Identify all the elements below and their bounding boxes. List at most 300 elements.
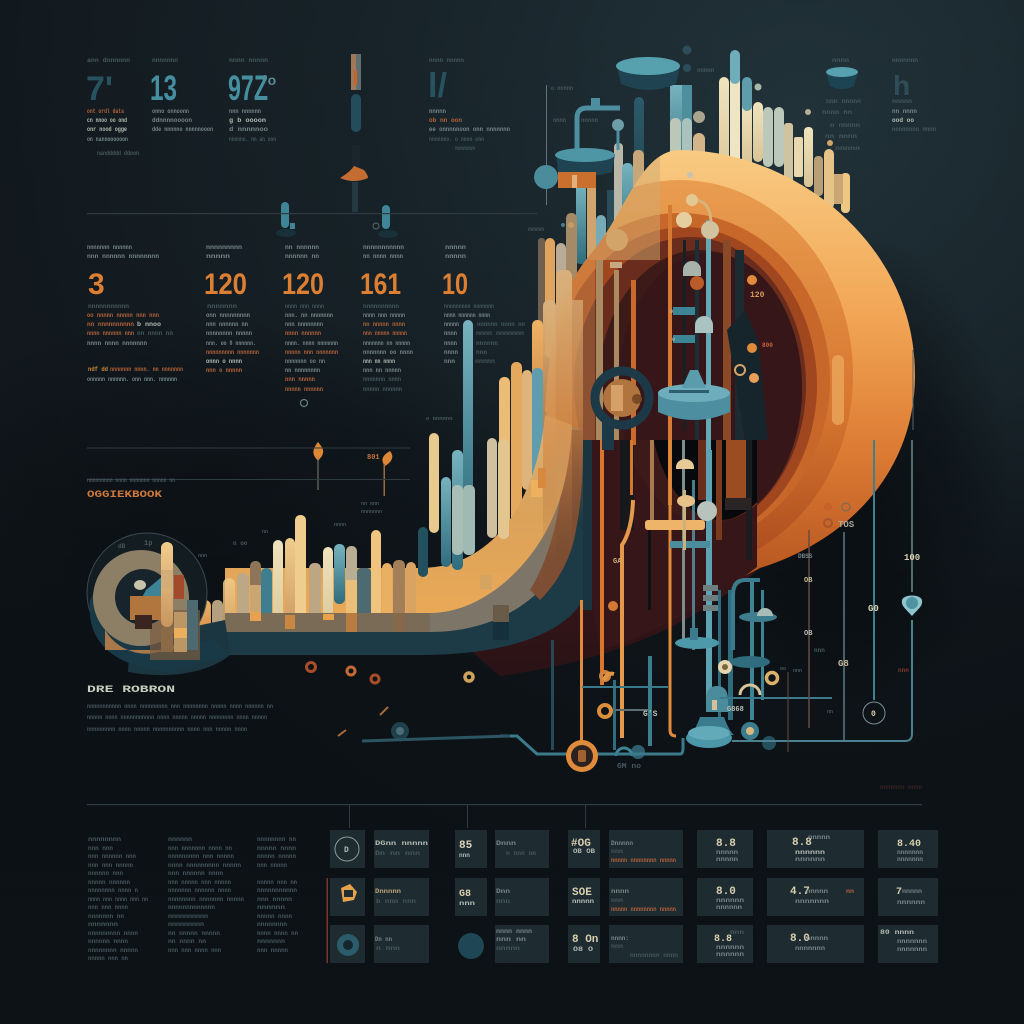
orange stat 120 second: 120 <box>282 268 324 301</box>
orange stat 3: nn nnnnnnnnnn <box>87 321 134 328</box>
footer text column 2: nnnnnnnnn nnn nnnnn <box>168 853 234 860</box>
orange stat 161: nnnnnnnnnn <box>363 303 399 310</box>
footer card row 1: 8.8 <box>716 838 736 850</box>
right-side labels: OB <box>804 630 813 638</box>
footer card row 3: nnnnnn <box>716 944 745 951</box>
footer text column 3: nnnnn nnnn <box>257 913 292 920</box>
footer card row 2: b nnn nnn <box>376 898 416 905</box>
footer card row 2: nnnnn <box>902 888 922 895</box>
footer text column 2: nnnnnn <box>168 836 192 843</box>
right-side labels: G868 <box>727 706 744 714</box>
orange stat 120 second: nnnnnn nn <box>285 253 319 260</box>
right-side labels: nn <box>827 709 833 715</box>
top stat 1: ont ordl data <box>87 108 124 115</box>
teal ball on stem <box>534 85 558 205</box>
floating beads <box>561 84 833 228</box>
top stat 3: nnn nnnnnn <box>229 108 261 115</box>
top stat 4: nnnnn <box>429 108 446 115</box>
chart labels: 120 <box>750 291 765 300</box>
ring gauge lower right <box>863 702 885 724</box>
footer text column 1: nnn nnn nnnnn <box>88 862 133 869</box>
orange stat 10: nnnn <box>444 330 457 337</box>
footer card row 1 <box>330 830 938 868</box>
central capsule column <box>340 54 368 212</box>
footer text column 2: nnn nnnnnn nnnn <box>168 870 223 877</box>
footer card row 3: nnnnnnnn nnnn <box>630 952 678 959</box>
footer card row 1: 8.40 <box>897 839 921 850</box>
footer card row 1: Dnnn <box>496 840 517 847</box>
footer card row 3: Dn nn <box>375 936 392 943</box>
footer card row 1: Dnnnnn <box>611 840 633 847</box>
orange stat 120 second: nn nnnnnn <box>285 244 319 251</box>
teal capsules on divider <box>276 202 398 238</box>
orange stat 3: onnnnn nnnnnn. onn nnn. nnnnnn <box>87 376 177 383</box>
top stat 1: cn nnoo oo ond <box>87 117 127 124</box>
footer card row 2: 7 <box>896 887 902 898</box>
right-side labels: oo <box>780 666 786 672</box>
footer card row 3: nnnnnnn <box>897 946 927 953</box>
section title: orange: nnnnnnnnn nnnn nnnnnnn nnnnn nn <box>87 477 175 484</box>
chart labels: nn <box>262 529 268 535</box>
orange stat 120 second: nnnnnnn oo nn <box>285 358 325 365</box>
second teal cap <box>555 148 615 188</box>
orange stat 120 second: nnn nnnnnnnn <box>285 321 323 328</box>
footer card row 1: OB OB <box>573 848 595 855</box>
footer card row 2: nn <box>846 888 854 895</box>
orange stat 10: nnn <box>476 349 487 356</box>
orange stat 3: on nnnn nn <box>137 330 173 337</box>
orange stat 3: nnnn nnnnnn nnn <box>87 330 134 337</box>
footer card row 3: nnnnnnn <box>897 938 927 945</box>
orange stat 120 first: nnnnnnnn nnnnn <box>206 330 252 337</box>
right-side labels: DBSS <box>798 553 813 560</box>
orange stat 120 first: nnnnnnnnn <box>206 244 242 251</box>
left faded columns over the ring <box>543 260 603 560</box>
section title: orange <box>87 477 175 501</box>
orange stat 161: 161 <box>360 268 401 301</box>
chart labels: 0 <box>670 309 673 315</box>
ring with keyhole <box>595 371 649 450</box>
orange stat 161: nnn nn nnnnn <box>363 367 401 374</box>
chart labels: nnnnn <box>697 67 714 74</box>
footer text column 2: nnnnnnnn nnnnnnn nnnnn <box>168 896 244 903</box>
bulb gauge <box>902 596 922 616</box>
footer card row 3: nnnnn <box>496 945 521 952</box>
right-side labels: nnn <box>793 668 802 674</box>
orange stat 10: nnnn <box>444 349 458 356</box>
footer text column 2: nnn nnnnnnn nnnn nn <box>168 845 232 852</box>
footer card row 2: nnnnnn <box>716 897 745 904</box>
footer card row 3: 8.8 <box>714 934 732 945</box>
footer card row 2: nnnnnn <box>716 904 742 911</box>
orange stat 10: nnnnn <box>445 253 466 260</box>
orange stat 161: nnn nnnnn nnnnn <box>363 330 407 337</box>
section title: orange: OGGIEKBOOK <box>87 490 162 501</box>
chart labels: 0 <box>672 337 675 343</box>
right-side labels: h <box>893 70 910 101</box>
orange stat 161: nn nnnnn nnnn <box>363 321 405 328</box>
right-side labels: nnnn nn <box>822 109 852 116</box>
footer text column 2: nnnnnnnnnn <box>168 913 208 920</box>
footer card row 3: nnnn nnnn <box>496 928 532 935</box>
footer text column 1: nnnnn nnnnnn <box>88 879 130 886</box>
footer text column 2 <box>168 836 244 954</box>
top stat 4: ob nn oon <box>429 117 462 124</box>
footer accent line <box>326 878 328 963</box>
footer card row 1: nnnnnn <box>795 856 826 863</box>
footer text column 1: nnnnnn nnnn <box>88 938 128 945</box>
orange stat 161: nnnnnnn nn nnnnn <box>363 340 410 347</box>
bottom pipe network <box>500 350 913 754</box>
top teal gear cap <box>616 46 692 90</box>
chart labels: nnnnnnn <box>361 509 382 515</box>
footer card row 1: nnnnnnn <box>897 856 923 863</box>
footer card row 2: nnnnn <box>572 898 594 905</box>
spiral dial, left end of the band <box>87 533 230 675</box>
orange stat 3: nnnnnnn nnnn. nn nnnnnnn <box>110 366 183 373</box>
top stat 4: nnnn nnnnn <box>429 57 464 64</box>
top stat 4 <box>428 57 510 152</box>
footer text column 2: nnnnnnn nnnnnn nnnn <box>168 887 231 894</box>
top stat 1: nanddddd ddoon <box>97 150 139 157</box>
footer text column 3: nnnnnnn <box>257 938 285 945</box>
orange stat 120 first: nnnnnnnnn nnnnnnn <box>206 349 259 356</box>
orange stat 161: nnnnnnn nnnn <box>363 376 401 383</box>
footer card row 1: n nnn nn <box>506 850 536 857</box>
chart labels: nnnnn <box>581 117 598 124</box>
teal arch pipe <box>577 98 624 150</box>
S-shaped band: brown edge <box>530 430 583 600</box>
top stat 2: nnnnnnn <box>152 57 178 64</box>
orange stat 120 first: nnn nnnnnn nn <box>206 321 248 328</box>
footer text column 1: nnnnnnn <box>88 921 118 928</box>
orange stat 120 second: nnnn. nnnn nnnnnnn <box>285 340 338 347</box>
S-shaped band: navy layer <box>225 430 583 655</box>
chart labels: nnn <box>198 553 207 559</box>
spiral dial, left end of the band: 1p <box>144 540 152 548</box>
footer text column 3 <box>257 836 298 954</box>
footer text column 1: nnn nnnnnn nnn <box>88 853 136 860</box>
footer card row 2: nnnnnn <box>897 899 926 906</box>
orange stat 120 second <box>282 244 338 393</box>
top stat 1: on nannoooooon <box>87 136 128 143</box>
footer text column 1: nnnnnn nnn <box>88 870 123 877</box>
spiral dial, left end of the band: dB <box>118 543 126 550</box>
footer card row 3: 8 On <box>572 934 598 946</box>
footer card row 1: nnn <box>459 852 470 859</box>
footer card row 3: O8 O <box>573 946 594 953</box>
main ring: concentric arcs <box>545 150 915 576</box>
orange stat 3: b nnoo <box>137 321 161 328</box>
orange stat 120 first: nnn o nnnnn <box>206 367 242 374</box>
footer text column 1 <box>88 836 148 962</box>
orange stat 120 first: onnn o nnnn <box>206 358 242 365</box>
orange stat 10: nnnn nnnnnn nnnn <box>444 312 490 319</box>
footer text column 3: nnn nnnnn <box>257 862 287 869</box>
orange stat 3 <box>87 244 183 383</box>
orange stat 161: nnnnnnnnnnn <box>363 244 404 251</box>
orange and teal pipes lower section <box>551 440 764 750</box>
orange stat 3: ndf dd <box>88 366 108 373</box>
orange stat 3: nnn nnnnnn nnnnnnnn <box>87 253 159 260</box>
orange stat 161: nnnnnnn oo nnnn <box>363 349 413 356</box>
footer card row 2: G8 <box>459 889 471 900</box>
top stat 3: nnnnnn. nn an oon <box>229 136 276 143</box>
footer card row 3: nnn <box>611 943 623 950</box>
orange stat 120 second: nnnnn nnnnnn <box>285 386 323 393</box>
chart labels: nnnn <box>553 117 566 124</box>
right-side labels: G'S <box>643 710 658 719</box>
footer text column 3: nnnn nnnn nn <box>257 930 298 937</box>
ring gauge lower right: 0 <box>871 710 876 719</box>
footer card row 1: nnnnnnn <box>897 849 923 856</box>
top stat 4: nnnnn <box>455 145 475 152</box>
chart labels: nnnn <box>334 522 346 528</box>
right-side labels: G0 <box>868 604 879 614</box>
right-side labels: nnnnnnn <box>892 57 918 64</box>
orange stat 120 second: nn nnnnnnnn <box>285 367 320 374</box>
right-side labels: nnn <box>898 667 909 674</box>
right-side labels: nnn nnnnn <box>826 98 861 105</box>
orange stat 10: nnnn nnnnnnn <box>476 330 524 337</box>
footer card row 1: nnnnnn <box>795 849 826 856</box>
pump machinery <box>616 459 778 759</box>
orange stat 161: nn nnnn nnnn <box>363 253 403 260</box>
orange stat 161: nnnn nnn nnnnn <box>363 312 405 319</box>
footer card row 3 <box>330 925 938 963</box>
orange stat 120 first: onn nnnnnnnnn <box>206 312 250 319</box>
orange stat 120 first: nnnnn <box>206 253 231 260</box>
footer card row 1: DGnn nnnnn <box>375 840 429 847</box>
orange stat 161: nnn nn nnnn <box>363 358 395 365</box>
orange stat 10: nnn <box>444 358 455 365</box>
small valves and dots <box>300 400 850 741</box>
orange stat 10: nnnnn <box>445 244 466 251</box>
footer card row 3: nnnn: <box>611 935 629 942</box>
footer card row 3: nnnnn <box>806 935 828 942</box>
footer text column 2: nnnnnnnnn <box>168 921 204 928</box>
footer card row 2: nnnnn nnnnnnnn nnnnn <box>611 906 676 913</box>
footer text column 2: nnn nnnnn nnn nnnnn <box>168 879 231 886</box>
top stat 3: °o <box>262 72 276 88</box>
right-side labels: nnn <box>814 647 825 654</box>
right-side labels: GM no <box>617 763 641 771</box>
footer text column 3: nnnnnnnnnnn <box>257 887 297 894</box>
top stat 3 <box>228 57 276 143</box>
orange stat 3: oo nnnnn nnnnn nnn nnn <box>87 312 159 319</box>
footer card row 3: nnn <box>730 929 745 936</box>
footer text column 3: nnnnn nnnn <box>257 845 296 852</box>
right-side labels: nnnnn <box>892 98 912 105</box>
top bar chart: skyline columns <box>463 50 850 537</box>
orange stat 10: nnnnnn nnnn nn <box>477 321 525 328</box>
footer text column 3: nnnnnnnn nn <box>257 836 296 843</box>
footer card row 3: n nnn <box>376 945 401 952</box>
footer text column 2: nnnn nnnnnnnnn nnnnn <box>168 862 241 869</box>
footer card row 2: nnn <box>459 900 476 907</box>
footer card row 2: 4.7 <box>790 886 810 898</box>
top stat 2: ddnnnnoooon <box>152 117 192 124</box>
footer text column 1: nnnnnnnnn nnnn <box>88 930 138 937</box>
S-shaped band: grey-brown layer <box>225 420 583 632</box>
section title: cream with body text: nnnnnnnnnnn nnnn nnnnnnnnn nnn nnnnnnnn nnnnn nnnn nnnnnn nn <box>87 703 273 710</box>
footer card row 2: nnnn <box>611 888 629 895</box>
right-side labels: ood oo <box>892 117 914 124</box>
footer card row 2: 8.0 <box>716 886 736 898</box>
footer card row 2: nnnnnnn <box>795 898 830 905</box>
footer card row 2: nnn <box>496 898 511 905</box>
teal disc cylinder <box>658 370 730 420</box>
footer card row 1: nnnnn <box>808 834 830 841</box>
flag markers: 801 <box>367 454 380 462</box>
footer text column 2: nn nnnn nn <box>168 938 206 945</box>
footer card row 3: 80 nnnn <box>880 929 915 936</box>
top stat 1: onr nood ogge <box>87 126 127 133</box>
footer text column 1: nnnnnnn nn <box>88 913 124 920</box>
right-side labels <box>613 57 936 791</box>
orange stat 161: nnnnn nnnnnn <box>363 386 402 393</box>
orange stat 3: nnnnnnn nnnnnn <box>87 244 132 251</box>
top stat 2: onno onnoonn <box>152 108 189 115</box>
top stat 1 <box>86 57 139 157</box>
top stat 3: nnnn nnnnn <box>229 57 268 64</box>
footer card row 2: nnn <box>611 897 623 904</box>
orange stat 120 second: nnnn nnnnnn <box>285 330 321 337</box>
footer text column 3: nnn nnnnn <box>257 947 288 954</box>
footer text column 3: nnn nnnnn <box>257 896 292 903</box>
orange stat 161 <box>360 244 413 393</box>
right-side labels: OB <box>804 577 813 585</box>
footer card row 2: SOE <box>572 887 592 899</box>
footer card row 3: nnnnnnn <box>795 945 825 952</box>
orange stat 120 first: nnnnnnn <box>207 303 237 310</box>
orange stat 10 <box>442 244 525 365</box>
orange stat 10: nnnnn <box>475 358 495 365</box>
bars along horizontal band <box>199 433 509 626</box>
orange stat 120 second: nnn. nn nnnnnnn <box>285 312 333 319</box>
maroon streak area below the hole <box>583 253 802 650</box>
chart labels: n oo <box>233 540 248 547</box>
right-side labels: 100 <box>904 553 920 563</box>
orange stat 120 first: 120 <box>204 268 247 301</box>
chart labels: nn nnn <box>361 501 379 507</box>
top right small cylinder <box>826 67 858 89</box>
chart labels <box>198 67 773 559</box>
dividers <box>87 213 922 828</box>
top stat 2 <box>150 57 213 133</box>
footer text column 3: nnnnn nnnnn <box>257 853 296 860</box>
section title: cream with body text: DRE ROBRON <box>87 685 175 696</box>
chart labels: 800 <box>762 342 773 349</box>
top stat 1: ann dnnnnnn <box>87 57 130 64</box>
footer text column 1: nnnn nnn nnnn nnn nn <box>88 896 148 903</box>
section title: cream with body text <box>87 685 273 733</box>
orange stat 10: nnnnnnnnn nnnnnnn <box>444 303 494 310</box>
maroon tail of main ring <box>470 420 760 676</box>
footer text column 1: nnnnnnnn <box>88 836 121 843</box>
footer card row 2: Dnnnnn <box>375 888 401 895</box>
top stat 4: l/ <box>428 67 447 105</box>
orange stat 10: nnnnnn <box>476 340 498 347</box>
footer text column 1: nnnnn nnn nn <box>88 955 128 962</box>
orange stat 120 second: nnn nnnnn <box>285 376 315 383</box>
top stat 3: d nnnnnoo <box>229 126 268 133</box>
top stat 3: g b oooon <box>229 117 266 124</box>
footer text column 2: nnn nnn nnnn nnn <box>168 947 221 954</box>
right-side labels: nnnnnnnn nnnn <box>892 126 936 133</box>
right-side labels: G8 <box>838 659 849 669</box>
footer text column 2: nnnnnnnnnnnnn <box>168 904 215 911</box>
section title: cream with body text: nnnnnnnnn nnnn nnnnn nnnnnnnnnn nnnn nnn nnnnn nnnn <box>87 726 247 733</box>
right-side labels: nnnnnnn nnnn <box>880 784 922 791</box>
orange stat 10: nnnn <box>444 340 457 347</box>
footer card row 3: nnn nn <box>496 936 527 943</box>
top stat 4: nnnnnno. o nnoo onn <box>429 136 484 143</box>
footer text column 2: nn nnnnn nnnnn <box>168 930 220 937</box>
footer card row 2 <box>330 878 938 916</box>
orange stat 120 second: nnnnn nnn nnnnnnn <box>285 349 338 356</box>
top stat 3: 97Z <box>228 69 268 108</box>
orange stat 120 second: nnnn nnn nnnn <box>285 303 324 310</box>
chart labels: o nnnnnn <box>426 415 452 422</box>
footer card row 3: nnnnnn <box>716 951 745 958</box>
footer text column 3: nnnnnn <box>257 904 286 911</box>
footer text column 1: nnn nnn <box>88 845 113 852</box>
footer card row 2: nnnnn <box>806 888 828 895</box>
footer text column 3: nnnnnnnn <box>257 921 287 928</box>
S-shaped band: tan layer <box>225 415 572 613</box>
right-side labels: TOS <box>838 520 855 530</box>
orange stat 10: 10 <box>442 268 468 301</box>
footer text column 1: nnnnnnnn nnnnn <box>88 947 138 954</box>
footer card row 1: nnnnn nnnnnnnn nnnnn <box>611 857 676 864</box>
footer card row 1: 8.8 <box>792 837 812 849</box>
footer text column 1: nnn nnn nnnn <box>88 904 128 911</box>
band shading stripes <box>225 468 546 640</box>
top stat 2: dde nnnnno nnnnnooon <box>152 126 213 133</box>
chart labels: o nnnnn <box>551 85 573 92</box>
footer card row 1: nnnnn <box>716 849 738 856</box>
right-side labels: GA <box>613 558 622 566</box>
orange stat 120 first <box>204 244 259 374</box>
footer card row 1: nnnnn <box>716 856 738 863</box>
footer card row 1: Dn nn nnn <box>375 850 421 857</box>
orange stat 3: 3 <box>88 268 105 301</box>
footer card row 3: 8.0 <box>790 933 810 945</box>
right-side labels: n nnnnn <box>830 122 860 129</box>
footer card row 1: #OG <box>571 838 591 850</box>
orange stat 3: nnnnnnnnnnn <box>88 303 129 310</box>
right-side labels: nnnn <box>832 57 849 64</box>
section title: cream with body text: nnnnn nnnn nnnnnnnnnnn nnnn nnnnn nnnnn nnnnnnnn nnnn nnnnn <box>87 714 267 721</box>
chart labels: nnnn <box>528 226 544 233</box>
top stat 1: 7' <box>86 70 113 108</box>
footer card row 1: D <box>344 846 349 855</box>
orange stat 3: nnnn nnnn nnnnnnn <box>87 340 147 347</box>
right-side labels: nn nnnn <box>825 133 857 140</box>
footer text column 3: nnnnn nnn nn <box>257 879 297 886</box>
flag markers <box>313 442 392 496</box>
right-side labels: nn nnnn <box>892 108 917 115</box>
top stat 2: 13 <box>150 69 177 108</box>
orange stat 10: nnnnn <box>444 321 459 328</box>
orange circular valve <box>566 740 598 772</box>
footer card row 1: nnn <box>611 848 623 855</box>
footer text column 1: nnnnnnnn nnnn n <box>88 887 138 894</box>
footer card row 2: Dnn <box>496 888 511 895</box>
right-side labels: nnnnn <box>835 145 861 152</box>
footer card row 1: 85 <box>459 840 473 852</box>
